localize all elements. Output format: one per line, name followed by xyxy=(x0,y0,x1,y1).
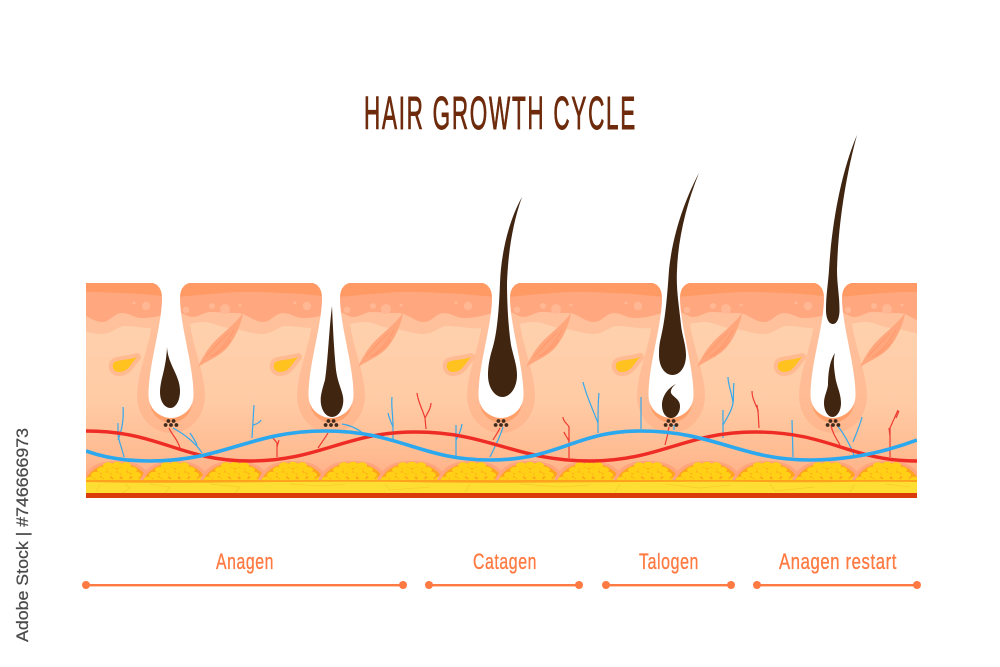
phase: Talogen xyxy=(602,549,735,589)
epidermis layers xyxy=(86,283,917,334)
hair: stage 1 xyxy=(160,347,180,408)
hair: stage 5 new hair xyxy=(824,353,841,417)
phase: Anagen: Anagen xyxy=(216,549,274,574)
phase: Catagen: Catagen xyxy=(473,549,537,574)
hair follicle openings xyxy=(146,282,858,422)
hair: stage 2 xyxy=(321,306,343,417)
dermis xyxy=(86,322,917,473)
hair: stage 4 new hair xyxy=(662,384,680,418)
text: HAIR GROWTH CYCLE xyxy=(364,87,637,139)
hair: stage 3 xyxy=(488,197,522,397)
red capillaries xyxy=(169,391,899,458)
arrector pili muscles xyxy=(198,313,905,367)
blue main vessel xyxy=(86,431,917,461)
yellow subcutaneous layer xyxy=(86,480,917,494)
skin cross-section xyxy=(86,283,917,498)
stock image credit: Adobe Stock | #746666973 xyxy=(13,428,32,642)
hair: stage 5 shedding hair xyxy=(826,135,857,324)
phase: Anagen xyxy=(82,549,407,589)
dermal papillae xyxy=(164,419,840,427)
red main vessel xyxy=(86,431,917,461)
phase: Catagen xyxy=(425,549,583,589)
phase: Talogen: Talogen xyxy=(639,549,699,574)
bottom red layer xyxy=(86,493,917,498)
hair: stage 4 old hair xyxy=(659,173,699,375)
follicle sheaths xyxy=(137,322,867,433)
phase: Anagen restart xyxy=(753,549,921,589)
fat lobules xyxy=(86,461,917,480)
blue capillaries xyxy=(118,377,862,457)
sebaceous glands xyxy=(113,357,802,372)
phase: Anagen restart: Anagen restart xyxy=(779,549,897,574)
